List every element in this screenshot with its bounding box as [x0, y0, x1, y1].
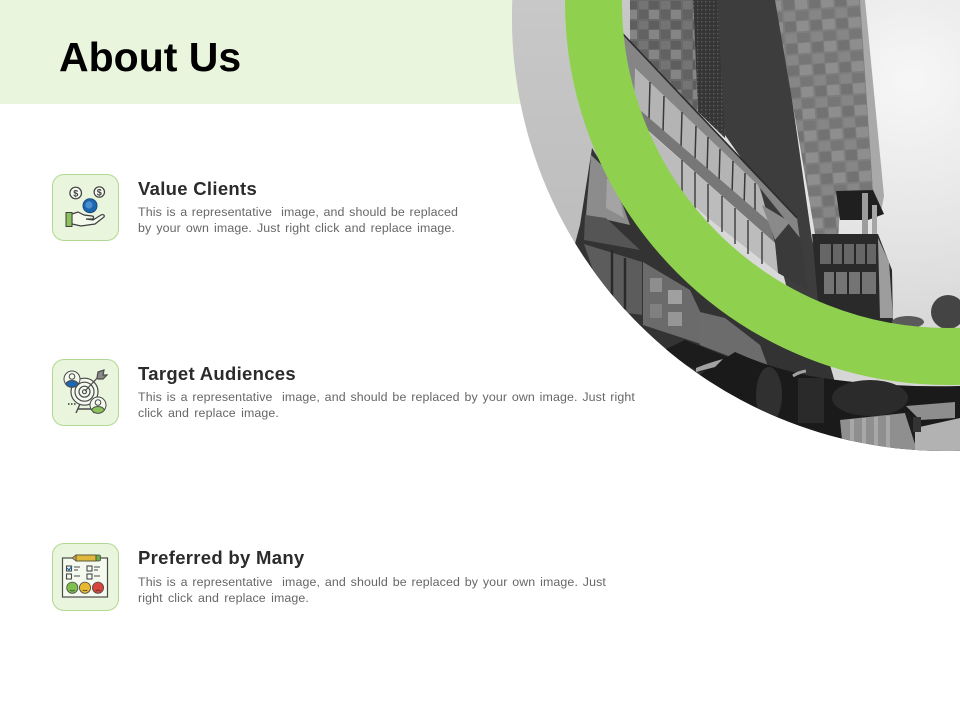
icon: target with people: [52, 359, 119, 426]
description: [138, 390, 635, 420]
tree reflection: [700, 312, 768, 364]
lower glazed building: [575, 148, 852, 441]
icon: hand with coins: [52, 174, 119, 241]
canopy: [836, 190, 884, 220]
icon: hand with coins: $: [73, 188, 78, 198]
description: click and replace image.: [138, 406, 279, 420]
description: This is a representative image, and should be replaced by your own image. Just right: [138, 390, 635, 404]
icon: hand with coins: $: [97, 187, 102, 197]
heading: Value Clients: [138, 178, 257, 199]
upper window row: [634, 68, 775, 227]
facade tower: [775, 0, 873, 240]
description: [138, 205, 458, 235]
description: This is a representative image, and should be replaced: [138, 205, 458, 219]
description: right click and replace image.: [138, 591, 309, 605]
trees and street: [700, 352, 960, 451]
trees on horizon: [931, 295, 960, 329]
item: value clients: [52, 174, 458, 241]
icon: feedback form: [52, 543, 119, 611]
planter: [840, 413, 917, 450]
item: target audiences: [52, 359, 635, 426]
lower right building: [812, 234, 893, 325]
title: About Us: [59, 34, 241, 80]
heading: Preferred by Many: [138, 547, 305, 568]
rear tower: [630, 0, 698, 115]
description: [138, 575, 606, 605]
mesh strip: [693, 0, 725, 138]
slanted building top strip: [622, 33, 800, 243]
header band: [0, 0, 540, 104]
plaza: [915, 418, 960, 451]
heading: Target Audiences: [138, 363, 296, 384]
apartment reflection: [643, 262, 704, 345]
sky: [520, 0, 960, 386]
lower window row: [650, 133, 778, 273]
mid strip: [634, 105, 775, 243]
facade edge: [860, 0, 884, 212]
green ring: [594, 0, 960, 356]
left crescent: [505, 0, 630, 260]
left glass panes: [586, 155, 630, 225]
dark central tower: [717, 0, 818, 301]
tall dark panes: [584, 244, 642, 315]
end reflection: [760, 188, 800, 276]
description: by your own image. Just right click and replace image.: [138, 221, 455, 235]
item: preferred by many: [52, 543, 606, 611]
circular building photo with green ring: [512, 0, 960, 451]
description: This is a representative image, and should be replaced by your own image. Just: [138, 575, 606, 589]
